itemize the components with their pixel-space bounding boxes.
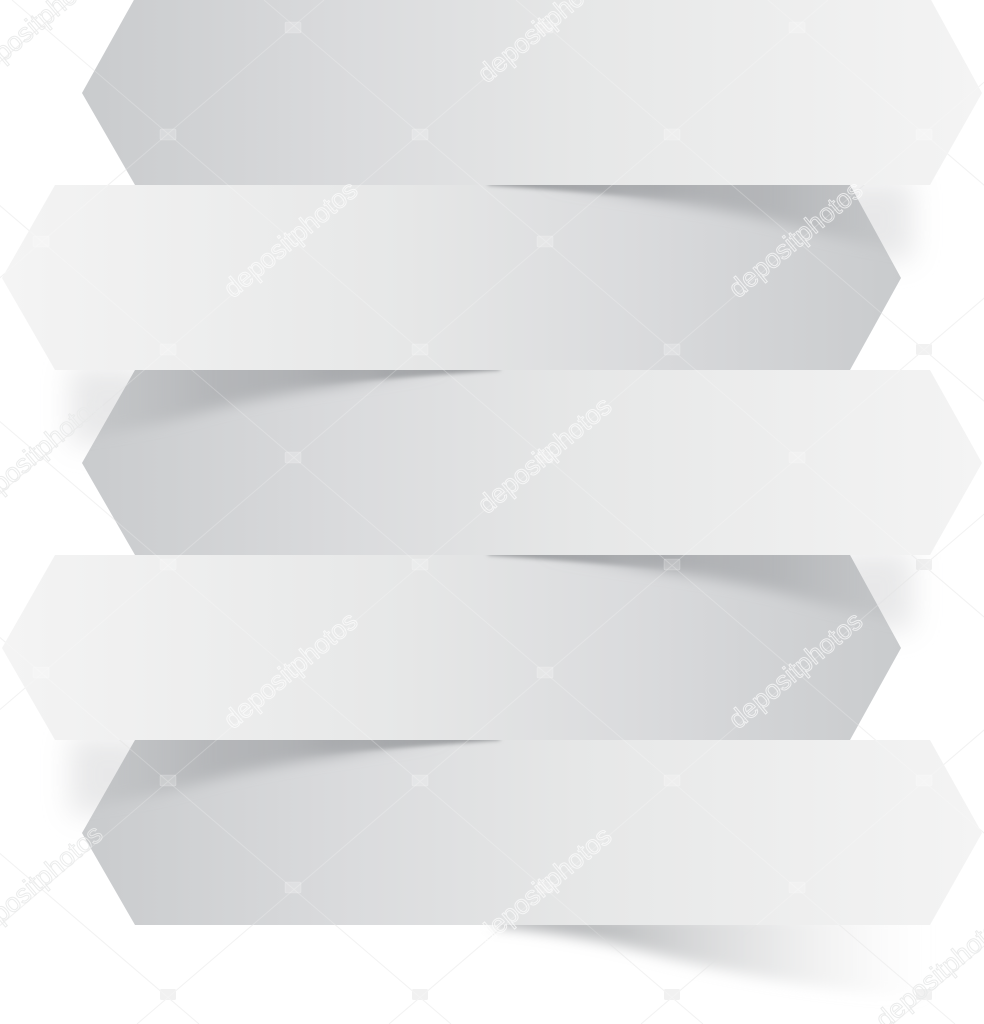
watermark text: depositphotos xyxy=(472,821,617,950)
shadow on white right of banner 2 xyxy=(835,180,913,260)
shadow on white left of banner 5 xyxy=(70,735,148,815)
shadow on white left of banner 3 xyxy=(70,365,148,445)
watermark text: depositphotos xyxy=(218,175,363,304)
shadow on white right of banner 4 xyxy=(835,550,913,630)
watermark text: depositphotos xyxy=(723,606,868,735)
watermark text: depositphotos xyxy=(472,391,617,520)
banner 1 xyxy=(82,0,982,185)
watermark cameras on white xyxy=(160,344,932,1000)
shadow below banner 5 xyxy=(490,925,852,985)
watermark camera icons xyxy=(33,22,932,893)
banner 2 with fold shadow xyxy=(2,185,901,370)
banner 5 with fold shadow xyxy=(82,740,982,925)
watermark text: depositphotos xyxy=(218,606,363,735)
banner 3 with fold shadow xyxy=(82,370,982,555)
banner 4 with fold shadow xyxy=(2,555,901,740)
watermark text: depositphotos xyxy=(723,175,868,304)
